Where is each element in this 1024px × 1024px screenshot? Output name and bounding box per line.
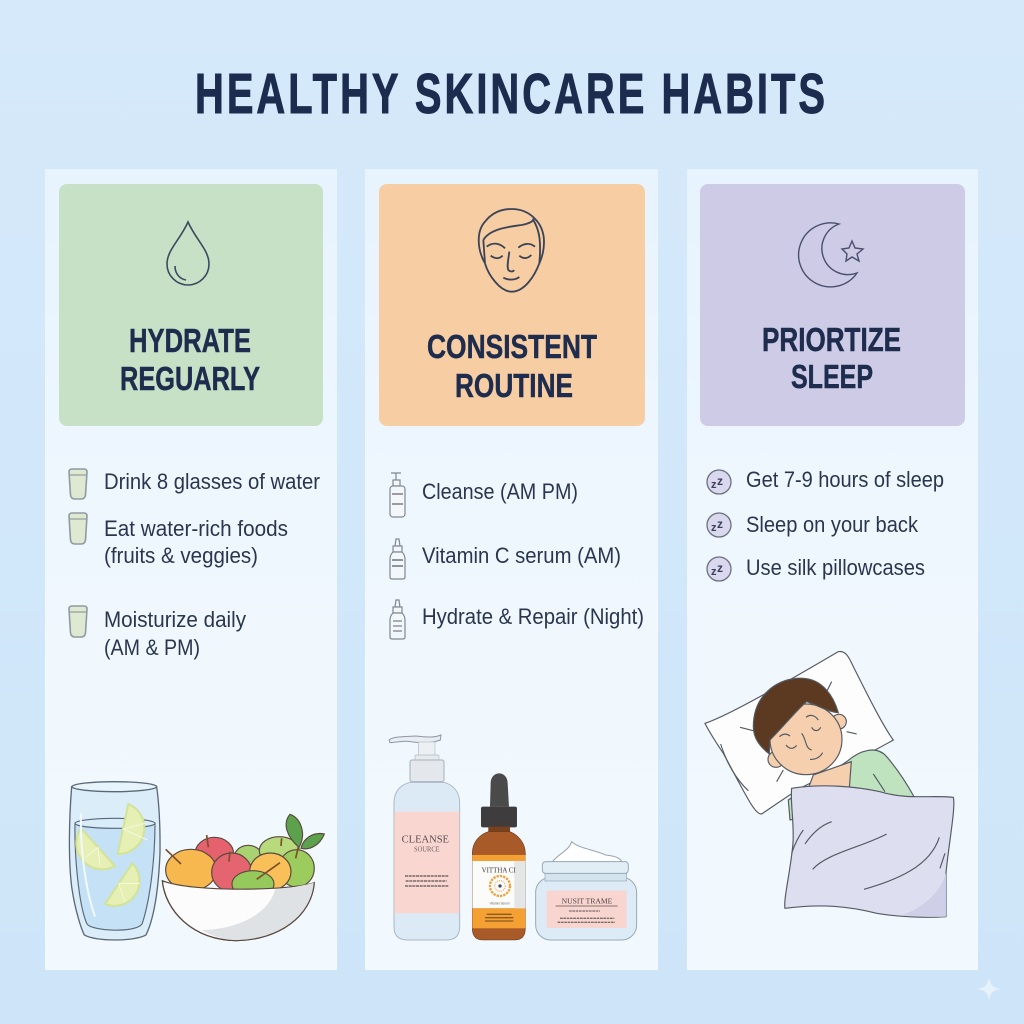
heading: hydrate regularly xyxy=(120,322,260,397)
icon: zz badge 2: z xyxy=(717,517,723,531)
text: cleanse: Cleanse (AM PM) xyxy=(422,479,578,504)
text: sleep on back: Sleep on your back xyxy=(746,512,919,537)
illustration: water glass with lemon xyxy=(69,782,160,940)
icon: glass 3 xyxy=(69,606,87,637)
illustration: cleanser bottle xyxy=(389,735,460,940)
illustration: cleanser bottle: CLEANSE xyxy=(402,833,449,845)
icon: pump bottle xyxy=(390,473,405,517)
text: water-rich foods xyxy=(104,516,288,568)
illustration: fruit bowl xyxy=(162,814,324,941)
text: moisturize: (AM & PM) xyxy=(104,635,200,660)
text: drink water: Drink 8 glasses of water xyxy=(104,469,320,494)
text: moisturize xyxy=(104,607,246,660)
panel: hydrate regularly xyxy=(45,169,337,970)
text: moisturize: Moisturize daily xyxy=(104,607,246,632)
list: hydrate tips xyxy=(69,469,320,660)
icon: glass 1 xyxy=(69,469,87,499)
icon: dropper bottle xyxy=(390,539,405,579)
icon: zz badge 2: z xyxy=(711,522,717,534)
list: sleep tips xyxy=(707,467,944,581)
icon: moon and star xyxy=(799,223,863,287)
heading: prioritize sleep xyxy=(762,321,901,395)
card: hydrate header xyxy=(59,184,323,426)
illustration: vitamin c dropper: Vitamin Serum xyxy=(490,901,510,905)
icon: glass 2 xyxy=(69,513,87,544)
decorative sparkle xyxy=(977,977,1001,1001)
icon: zz badge 1: z xyxy=(717,474,723,488)
illustration: sleeping person xyxy=(705,651,954,917)
heading: prioritize sleep: PRIORTIZE xyxy=(762,321,901,358)
panel: consistent routine xyxy=(365,169,658,970)
icon: face xyxy=(479,209,544,292)
illustration: vitamin c dropper xyxy=(472,773,525,940)
card: sleep header xyxy=(700,184,965,426)
text: hydrate and repair: Hydrate & Repair (Night) xyxy=(422,604,644,629)
heading: hydrate regularly: REGUARLY xyxy=(120,360,260,397)
heading: consistent routine: CONSISTENT xyxy=(427,328,597,365)
icon: serum bottle xyxy=(390,600,405,639)
card: routine header xyxy=(379,184,645,426)
illustration: cleanser bottle: SOURCE xyxy=(414,846,440,854)
heading: consistent routine xyxy=(427,328,597,404)
icon: zz badge 1 xyxy=(707,470,731,494)
icon: zz badge 1: z xyxy=(711,479,717,491)
text: silk pillowcases: Use silk pillowcases xyxy=(746,555,925,580)
heading: hydrate regularly: HYDRATE xyxy=(129,322,251,359)
title: HEALTHY SKINCARE HABITS xyxy=(195,62,825,126)
icon: zz badge 2 xyxy=(707,513,731,537)
icon: zz badge 3: z xyxy=(711,566,717,578)
illustration: vitamin c dropper: VITTHA CI xyxy=(482,866,516,875)
text: hours of sleep: Get 7-9 hours of sleep xyxy=(746,467,944,492)
text: vitamin c: Vitamin C serum (AM) xyxy=(422,543,621,568)
icon: water drop xyxy=(167,222,209,285)
icon: zz badge 3: z xyxy=(717,561,723,575)
illustration: night cream jar xyxy=(536,842,637,940)
illustration: night cream jar: NUSIT TRAME xyxy=(562,896,613,905)
text: water-rich foods: (fruits & veggies) xyxy=(104,543,258,568)
heading: consistent routine: ROUTINE xyxy=(455,367,573,404)
panel: prioritize sleep xyxy=(687,169,978,970)
text: water-rich foods: Eat water-rich foods xyxy=(104,516,288,541)
heading: prioritize sleep: SLEEP xyxy=(791,358,873,395)
list: routine steps xyxy=(390,473,644,639)
icon: zz badge 3 xyxy=(707,557,731,581)
